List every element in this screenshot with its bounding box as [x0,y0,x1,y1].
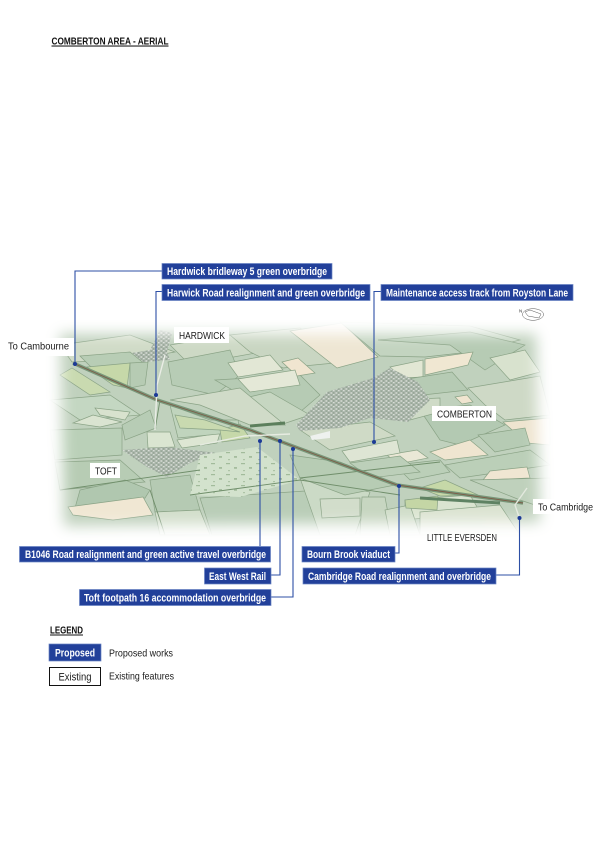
callout: Harwick Road realignment and green overbridge [154,284,370,397]
callout: East West Rail [204,439,282,584]
legend item: existing: Existing features [109,670,174,682]
legend item: existing: Existing [58,672,92,684]
legend item: proposed [49,644,173,661]
callout: B1046 Road realignment and green active travel overbridge: B1046 Road realignment and green active travel overbridge [25,549,266,561]
callout: Cambridge Road realignment and overbridge: Cambridge Road realignment and overbridge [308,571,491,583]
callout: B1046 Road realignment and green active travel overbridge [20,439,270,562]
place label: Comberton: COMBERTON [437,408,492,420]
legend item: existing [50,668,174,686]
callout: Maintenance access track from Royston Lane [372,284,573,444]
callout: Toft footpath 16 accommodation overbridge [80,447,295,606]
callout: Cambridge Road realignment and overbridge [303,516,522,584]
callout: Toft footpath 16 accommodation overbridge: Toft footpath 16 accommodation overbridge [84,592,266,604]
callout: Hardwick bridleway 5 green overbridge: Hardwick bridleway 5 green overbridge [167,266,327,278]
legend item: proposed: Proposed works [109,648,173,660]
legend item: proposed: Proposed [55,648,95,660]
callout: Hardwick bridleway 5 green overbridge [73,264,332,366]
village: Toft [122,447,217,477]
icon: north compass [519,308,544,320]
legend heading: LEGEND [50,626,83,636]
orchard fields south of Toft road [190,447,300,497]
aerial map [40,320,560,540]
place label: Little Eversden: LITTLE EVERSDEN [427,532,497,544]
legend [49,626,174,686]
callout: East West Rail: East West Rail [209,571,266,583]
icon: north compass: N [519,308,522,314]
place label: Hardwick: HARDWICK [179,330,225,342]
title: COMBERTON AREA - AERIAL [52,36,169,48]
callout: Harwick Road realignment and green overbridge: Harwick Road realignment and green overbridge [167,288,365,300]
village: Hardwick [132,330,172,362]
hedges [60,400,440,535]
village: Comberton [296,368,430,431]
railway corridor [73,355,527,520]
place label: Hardwick [174,327,229,343]
place label: Toft [90,463,120,478]
place label: Comberton [432,406,496,421]
place label: To Cambourne [0,338,74,356]
place label: Toft: TOFT [95,466,117,478]
place label: To Cambourne: To Cambourne [8,340,69,352]
callout: Bourn Brook viaduct [302,484,401,562]
callout: Bourn Brook viaduct: Bourn Brook viaduct [307,549,390,561]
